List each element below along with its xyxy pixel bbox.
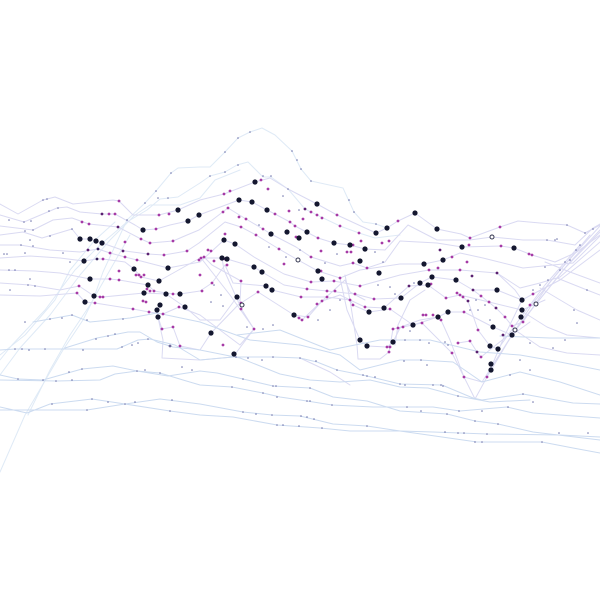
blue lower lines [0,313,600,453]
lavender upper lines [0,178,600,399]
steep pale lines on the left and hill top [0,128,400,472]
magenta markers [76,179,534,378]
ridge lines on the right [300,230,600,385]
small grey-blue markers along lines [3,131,594,443]
open ring markers [240,235,538,332]
large dark markers [77,179,525,373]
